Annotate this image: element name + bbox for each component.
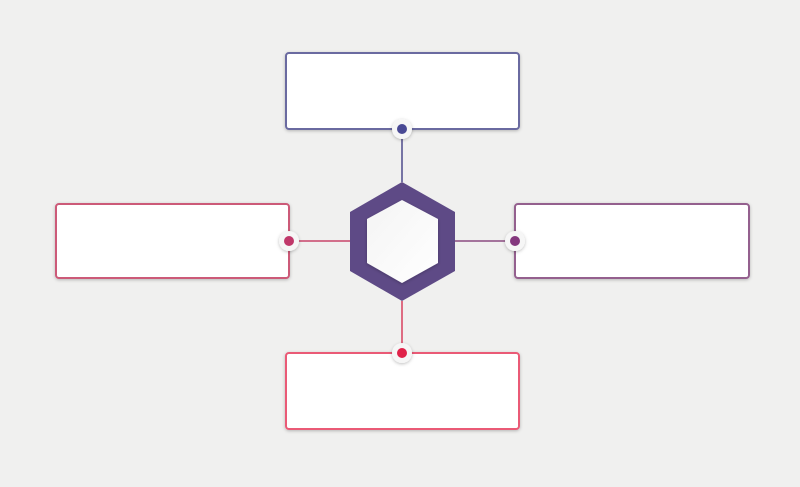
node: top dot (392, 119, 412, 139)
panel: bottom box (286, 353, 519, 429)
connector lines (289, 129, 515, 353)
central hexagon (350, 182, 455, 301)
node: left dot (279, 231, 299, 251)
node: bottom dot (392, 343, 412, 363)
panel: right box (515, 204, 749, 278)
panel: left box (56, 204, 289, 278)
panel: top box (286, 53, 519, 129)
node: right dot (505, 231, 525, 251)
